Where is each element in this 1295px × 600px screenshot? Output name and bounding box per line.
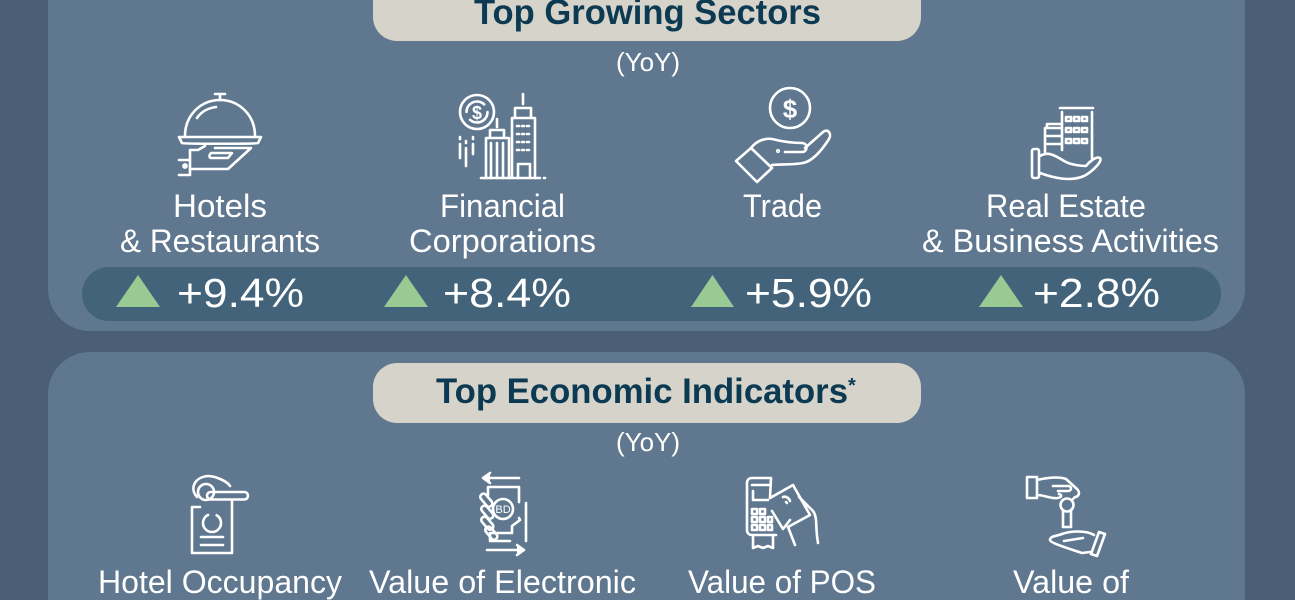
panel: top economic indicators — [48, 352, 1245, 600]
label: financial corporations — [409, 188, 596, 259]
label: value of: Value of — [1013, 564, 1129, 600]
icon: cloche and serving hand — [179, 94, 261, 175]
icon: hand passing key to hand — [1027, 477, 1105, 556]
value: hotels and restaurants up 9.4 percent: +9.4% — [177, 270, 304, 316]
icon: hand holding phone with BD coin: BD — [495, 504, 511, 516]
label: hotels and restaurants — [120, 188, 320, 259]
icon: hand holding coin — [736, 88, 830, 182]
label: real estate and business activities: Real Estate — [986, 188, 1146, 224]
icon: POS terminal and card — [747, 478, 818, 548]
value bar — [82, 267, 1221, 321]
value: real estate and business activities up 2.8 percent — [979, 270, 1160, 316]
value: hotels and restaurants up 9.4 percent — [116, 270, 304, 316]
subheading: year on year: (YoY) — [616, 427, 680, 457]
label: value of POS: Value of POS — [688, 564, 876, 600]
icon: hand holding coin: $ — [783, 94, 798, 124]
label: financial corporations: Financial — [440, 188, 565, 224]
label: trade: Trade — [743, 188, 822, 224]
panel: top growing sectors — [48, 0, 1245, 331]
value: real estate and business activities up 2.8 percent: +2.8% — [1033, 270, 1160, 316]
value: trade up 5.9 percent: +5.9% — [745, 270, 872, 316]
heading: top economic indicators: Top Economic Indicators — [436, 372, 848, 411]
subheading: year on year: (YoY) — [616, 47, 680, 77]
heading: top growing sectors — [373, 0, 921, 41]
label: real estate and business activities: & Business Activities — [922, 223, 1219, 259]
icon: hand holding real estate buildings — [1032, 108, 1101, 179]
value: trade up 5.9 percent — [691, 270, 872, 316]
label: hotels and restaurants: Hotels — [173, 188, 267, 224]
icon: financial buildings and coin — [460, 94, 545, 178]
value: financial corporations up 8.4 percent — [384, 270, 571, 316]
heading: top economic indicators: * — [848, 375, 856, 397]
label: real estate and business activities — [922, 188, 1219, 259]
icon: hand holding phone with BD coin — [479, 473, 526, 555]
value: financial corporations up 8.4 percent: +8.4% — [443, 270, 571, 316]
heading: top economic indicators — [373, 363, 921, 423]
icon: hotel door hanger — [192, 476, 248, 553]
label: value of electronic: Value of Electronic — [369, 564, 636, 600]
label: financial corporations: Corporations — [409, 223, 596, 259]
label: hotel occupancy: Hotel Occupancy — [98, 564, 342, 600]
icon: financial buildings and coin: $ — [472, 103, 482, 123]
label: hotels and restaurants: & Restaurants — [120, 223, 320, 259]
